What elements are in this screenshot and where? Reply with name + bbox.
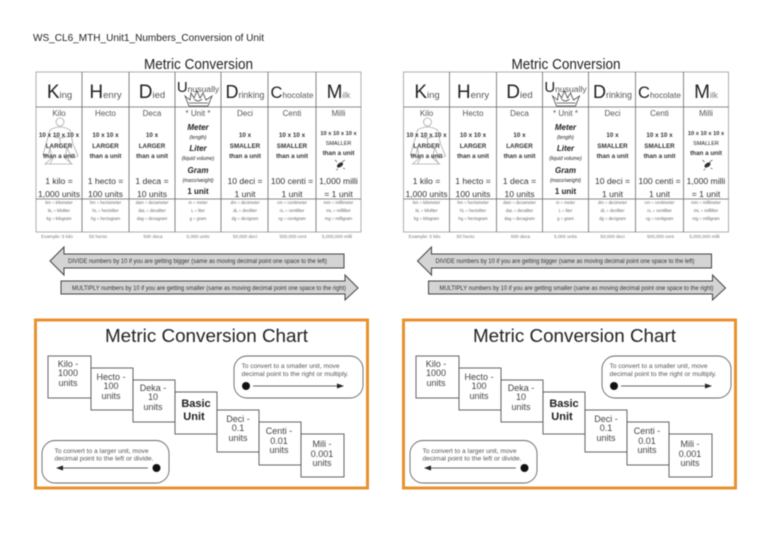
arrow: divide	[50, 247, 344, 275]
unit names: * Unit *	[553, 109, 578, 118]
staircase labels: units	[143, 402, 163, 412]
icon: crown	[552, 91, 580, 106]
staircase labels: Unit	[551, 411, 573, 423]
panel: right metric conversion table	[404, 57, 728, 300]
size comparison text: SMALLER	[277, 143, 308, 150]
callout: convert to smaller unit	[602, 356, 731, 398]
size comparison text: than a unit	[411, 153, 443, 160]
mnemonic header row: King	[414, 82, 440, 103]
callout: convert to larger unit: To convert to a larger unit, move	[422, 449, 517, 455]
abbreviations row: kL = kiloliter	[415, 208, 438, 213]
mnemonic header row: Henry	[89, 82, 122, 103]
size comparison text: SMALLER	[230, 143, 261, 150]
example row: 5,000 units	[187, 234, 210, 239]
icon: strongman	[410, 118, 446, 164]
abbreviations row: dL = deciliter	[233, 208, 257, 213]
icon: fly	[335, 160, 345, 170]
mnemonic header row: Chocolate	[271, 84, 314, 102]
base unit column: (mass/weight)	[182, 178, 214, 184]
abbreviations row: g = gram	[190, 216, 207, 221]
example row: Example: 5 kilo	[41, 234, 73, 239]
abbreviations row: kg = kilogram	[46, 216, 72, 221]
staircase labels: units	[637, 445, 657, 455]
arrow: divide: DIVIDE numbers by 10 if you are getting bigger (same as moving decimal point one space to the left)	[436, 258, 694, 265]
staircase labels	[58, 359, 333, 468]
unit names: Kilo	[420, 109, 434, 118]
heading: chart title: Metric Conversion Chart	[105, 325, 308, 346]
heading: chart title: Metric Conversion Chart	[473, 325, 676, 346]
mnemonic header row	[414, 79, 719, 103]
equivalence text: 1 hecto =	[455, 176, 491, 186]
example row	[41, 234, 352, 239]
size comparison text: SMALLER	[326, 141, 351, 147]
staircase labels: Mili -	[680, 439, 700, 449]
equivalence text: 1,000 milli	[319, 176, 358, 186]
size comparison text: 10 x	[146, 132, 159, 139]
staircase labels: Deci -	[594, 414, 618, 424]
example row: 500 deca	[511, 234, 531, 239]
size comparison text: 10 x	[606, 132, 619, 139]
size comparison text: 10 x 10 x	[460, 132, 487, 139]
equivalence text: 1 deca =	[503, 176, 536, 186]
mnemonic header row: Died	[506, 82, 533, 103]
equivalence text: 100 units	[88, 189, 123, 199]
abbreviations row: mL = milliliter	[694, 208, 719, 213]
staircase labels: Unit	[183, 411, 205, 423]
staircase labels: units	[312, 458, 332, 468]
staircase labels: units	[58, 378, 78, 388]
panel: left conversion chart	[36, 320, 368, 488]
base unit column	[549, 123, 582, 196]
staircase labels: Hecto -	[464, 372, 494, 382]
abbreviations row: cL = centiliter	[647, 208, 672, 213]
callout: convert to smaller unit: decimal point to the right or multiply.	[242, 372, 349, 378]
unit names: Deca	[143, 109, 162, 118]
base unit column: (length)	[190, 135, 207, 141]
abbreviations row: km = kilometer	[45, 200, 73, 205]
table grid	[36, 72, 361, 232]
base unit column: Liter	[557, 144, 575, 153]
abbreviations row: cL = centiliter	[280, 208, 305, 213]
abbreviations row: hL = hectoliter	[92, 208, 119, 213]
abbreviations row: dm = decimeter	[598, 200, 628, 205]
abbreviations row: L = liter	[559, 208, 573, 213]
icon: fly	[702, 160, 712, 170]
abbreviations row: hg = hectogram	[91, 216, 121, 221]
size comparison text	[406, 131, 725, 160]
equivalence text: 1 unit	[281, 189, 303, 199]
equivalence text: 100 centi =	[638, 176, 681, 186]
equivalence text: 1 hecto =	[88, 176, 123, 186]
arrow: divide	[418, 247, 712, 275]
staircase labels: 0.001	[311, 449, 333, 459]
unit names: Milli	[332, 109, 346, 118]
callout: convert to smaller unit: To convert to a smaller unit, move	[610, 364, 708, 370]
icon: crown	[185, 91, 212, 106]
document header: WS_CL6_MTH_Unit1_Numbers_Conversion of Unit	[33, 33, 264, 44]
base unit column: Meter	[187, 123, 210, 132]
size comparison text: SMALLER	[644, 143, 675, 150]
equivalence text: 1,000 milli	[687, 176, 725, 186]
equivalence text: 1,000 units	[38, 189, 80, 199]
abbreviations row: kg = kilogram	[414, 216, 440, 221]
unit names	[52, 109, 346, 118]
equivalence text: 1 kilo =	[45, 176, 73, 186]
unit names: Hecto	[463, 109, 484, 118]
staircase labels: 0.01	[638, 436, 656, 446]
staircase labels: 0.1	[232, 423, 244, 433]
mnemonic header row: Milk	[327, 82, 351, 103]
abbreviations row: dag = decagram	[504, 216, 535, 221]
abbreviations row: g = gram	[557, 216, 574, 221]
size comparison text: LARGER	[506, 143, 533, 150]
equivalence text: 1 deca =	[135, 176, 169, 186]
staircase labels: Hecto -	[96, 372, 126, 382]
abbreviations row: daL = decaliter	[506, 208, 534, 213]
example row: 5,000,000 milli	[689, 234, 720, 239]
size comparison text: than a unit	[644, 153, 676, 160]
abbreviations row: dg = decigram	[232, 216, 259, 221]
staircase labels: units	[680, 458, 700, 468]
abbreviations row: L = liter	[191, 208, 205, 213]
size comparison text: 10 x 10 x	[92, 132, 119, 139]
size comparison text: 10 x	[239, 132, 252, 139]
staircase labels: 10	[148, 392, 158, 402]
size comparison text: 10 x 10 x	[646, 132, 673, 139]
size comparison text: 10 x 10 x 10 x	[406, 132, 447, 139]
abbreviations row: cm = centimeter	[645, 200, 675, 205]
example row: 50,000 deci	[233, 234, 257, 239]
staircase labels: Deka -	[140, 383, 166, 393]
abbreviations row: mL = milliliter	[326, 208, 351, 213]
abbreviations row: dam = decameter	[503, 200, 536, 205]
example row: 50 hecto	[89, 234, 107, 239]
icon: strongman	[43, 118, 78, 164]
size comparison text: SMALLER	[597, 143, 628, 150]
base unit column: (liquid volume)	[182, 156, 215, 162]
mnemonic header row: Henry	[457, 82, 489, 103]
staircase labels	[426, 359, 701, 468]
size comparison text: SMALLER	[693, 141, 719, 147]
equivalence text	[38, 176, 358, 199]
size comparison text: LARGER	[46, 143, 73, 150]
staircase labels: units	[596, 433, 616, 443]
equivalence text: 1 unit	[602, 189, 624, 199]
base unit column: Gram	[188, 166, 208, 175]
example row: 50,000 deci	[600, 234, 625, 239]
abbreviations row: cm = centimeter	[277, 200, 308, 205]
unit names: Deca	[510, 109, 529, 118]
equivalence text: 100 units	[456, 189, 490, 199]
abbreviations row: mg = milligram	[325, 216, 353, 221]
mnemonic header row: Drinking	[226, 82, 265, 102]
staircase labels: 0.1	[600, 423, 612, 433]
abbreviations row: dam = decameter	[136, 200, 169, 205]
mnemonic header row: Chocolate	[638, 84, 681, 102]
unit names: Centi	[283, 109, 302, 118]
unit names: Milli	[699, 109, 713, 118]
callout: convert to larger unit: decimal point to the left or divide.	[54, 456, 154, 462]
callout: convert to larger unit	[410, 440, 537, 483]
abbreviations row: hL = hectoliter	[460, 208, 487, 213]
size comparison text: 10 x 10 x 10 x	[320, 131, 358, 137]
callout: convert to larger unit	[42, 440, 169, 483]
base unit column: Liter	[189, 144, 208, 153]
abbreviations row: m = meter	[189, 200, 208, 205]
abbreviations row: hg = hectogram	[458, 216, 488, 221]
staircase labels: Deci -	[226, 414, 250, 424]
abbreviations row: dg = decigram	[599, 216, 626, 221]
mnemonic header row: Drinking	[593, 82, 632, 102]
example row: 50 hecto	[457, 234, 475, 239]
staircase boxes	[416, 356, 712, 477]
panel: right conversion chart	[404, 320, 736, 488]
mnemonic header row: Unusually	[177, 79, 220, 96]
equivalence text: 10 units	[137, 189, 167, 199]
example row: 500,000 cent	[647, 234, 675, 239]
mnemonic header row: Died	[139, 82, 165, 103]
mnemonic header row	[47, 79, 351, 103]
base unit column: 1 unit	[555, 187, 576, 196]
staircase labels: 0.001	[679, 449, 701, 459]
callout: convert to smaller unit: decimal point to the right or multiply.	[610, 372, 717, 378]
staircase labels: Basic	[181, 398, 211, 410]
unit names: Centi	[650, 109, 669, 118]
equivalence text: 10 deci =	[227, 176, 263, 186]
example row: Example: 5 kilo	[409, 234, 441, 239]
abbreviations row: hm = hectometer	[90, 200, 122, 205]
staircase labels: 100	[103, 381, 119, 391]
staircase labels: Mili -	[312, 439, 332, 449]
abbreviations row: mm = millimeter	[691, 200, 721, 205]
staircase boxes	[48, 356, 344, 477]
size comparison text: 10 x 10 x 10 x	[39, 132, 80, 139]
abbreviations row: dag = decagram	[137, 216, 168, 221]
abbreviations row: hm = hectometer	[457, 200, 489, 205]
staircase labels: Kilo -	[426, 359, 446, 369]
equivalence text: 10 deci =	[595, 176, 630, 186]
arrow: multiply: MULTIPLY numbers by 10 if you are getting smaller (same as moving decimal point one space to the right)	[440, 285, 714, 292]
size comparison text: than a unit	[457, 153, 490, 160]
arrow: divide: DIVIDE numbers by 10 if you are getting bigger (same as moving decimal point one space to the left)	[68, 258, 327, 265]
abbreviations row: cg = centigram	[646, 216, 674, 221]
staircase labels: units	[101, 391, 121, 401]
staircase labels: units	[511, 402, 531, 412]
unit names: Deci	[604, 109, 621, 118]
equivalence text: 1,000 units	[405, 189, 448, 199]
arrow: multiply: MULTIPLY numbers by 10 if you are getting smaller (same as moving decimal point one space to the right)	[72, 285, 346, 292]
arrow: multiply	[61, 275, 358, 300]
unit names	[420, 109, 713, 118]
abbreviations row: mg = milligram	[692, 216, 720, 221]
size comparison text: LARGER	[92, 143, 119, 150]
base unit column: 1 unit	[187, 187, 209, 196]
abbreviations row: dL = deciliter	[601, 208, 625, 213]
staircase labels: units	[426, 378, 446, 388]
example row: 5,000,000 milli	[322, 234, 352, 239]
size comparison text: 10 x 10 x 10 x	[688, 131, 725, 137]
size comparison text: than a unit	[597, 153, 629, 160]
size comparison text	[39, 131, 358, 160]
abbreviations row	[413, 200, 721, 221]
size comparison text: LARGER	[460, 143, 487, 150]
unit names: * Unit *	[186, 109, 210, 118]
base unit column: Meter	[555, 123, 577, 132]
abbreviations row: cg = centigram	[278, 216, 306, 221]
size comparison text: 10 x 10 x	[279, 132, 306, 139]
staircase labels: 1000	[426, 368, 446, 378]
size comparison text: than a unit	[136, 153, 169, 160]
base unit column: Gram	[555, 166, 576, 175]
equivalence text: 10 units	[504, 189, 535, 199]
staircase labels: units	[269, 445, 289, 455]
staircase labels: Deka -	[508, 383, 534, 393]
example row: 5,000 units	[554, 234, 578, 239]
staircase labels: Basic	[549, 398, 579, 410]
abbreviations row: dm = decimeter	[231, 200, 260, 205]
callout: convert to larger unit: To convert to a larger unit, move	[54, 449, 149, 455]
staircase labels: 0.01	[270, 436, 288, 446]
panel: left metric conversion table	[36, 57, 361, 300]
table grid	[404, 72, 728, 232]
mnemonic header row: King	[47, 82, 72, 103]
staircase labels: units	[469, 391, 489, 401]
abbreviations row: mm = millimeter	[324, 200, 354, 205]
heading: left table title: Metric Conversion	[144, 57, 253, 73]
staircase labels: Centi -	[266, 426, 292, 436]
heading: right table title: Metric Conversion	[512, 57, 620, 73]
abbreviations row: km = kilometer	[413, 200, 441, 205]
base unit column: (length)	[557, 135, 574, 141]
unit names: Kilo	[52, 109, 66, 118]
unit names: Hecto	[95, 109, 116, 118]
arrow: multiply	[428, 275, 726, 300]
example row	[409, 234, 720, 239]
staircase labels: Kilo -	[58, 359, 78, 369]
size comparison text: LARGER	[413, 143, 440, 150]
equivalence text: 1 kilo =	[413, 176, 440, 186]
size comparison text: LARGER	[139, 143, 166, 150]
mnemonic header row: Unusually	[544, 79, 587, 96]
base unit column: (mass/weight)	[550, 178, 581, 184]
equivalence text: 100 centi =	[271, 176, 313, 186]
size comparison text: than a unit	[276, 153, 309, 160]
size comparison text: than a unit	[90, 153, 122, 160]
abbreviations row	[45, 200, 354, 221]
size comparison text: than a unit	[323, 150, 355, 157]
size comparison text: 10 x	[513, 132, 526, 139]
abbreviations row: kL = kiloliter	[48, 208, 71, 213]
abbreviations row: daL = decaliter	[138, 208, 166, 213]
orange frame	[404, 320, 736, 488]
mnemonic header row: Milk	[694, 82, 719, 103]
staircase labels: 1000	[58, 368, 78, 378]
staircase labels: 10	[516, 392, 526, 402]
equivalence text: = 1 unit	[324, 189, 353, 199]
orange frame	[36, 320, 368, 488]
equivalence text	[405, 176, 725, 199]
size comparison text: than a unit	[43, 153, 76, 160]
size comparison text: than a unit	[229, 153, 262, 160]
callout: convert to smaller unit	[234, 356, 363, 398]
base unit column: (liquid volume)	[549, 156, 582, 162]
equivalence text: 1 unit	[234, 189, 256, 199]
abbreviations row: m = meter	[556, 200, 576, 205]
staircase labels: Centi -	[634, 426, 660, 436]
staircase labels: 100	[471, 381, 487, 391]
staircase labels: units	[228, 433, 248, 443]
base unit column	[182, 123, 215, 196]
callout: convert to smaller unit: To convert to a smaller unit, move	[242, 364, 340, 370]
example row: 500,000 cent	[279, 234, 307, 239]
equivalence text: = 1 unit	[692, 189, 721, 199]
example row: 500 deca	[143, 234, 163, 239]
unit names: Deci	[237, 109, 253, 118]
callout: convert to larger unit: decimal point to the left or divide.	[422, 456, 522, 462]
size comparison text: than a unit	[504, 153, 536, 160]
size comparison text: than a unit	[690, 150, 723, 157]
equivalence text: 1 unit	[649, 189, 671, 199]
